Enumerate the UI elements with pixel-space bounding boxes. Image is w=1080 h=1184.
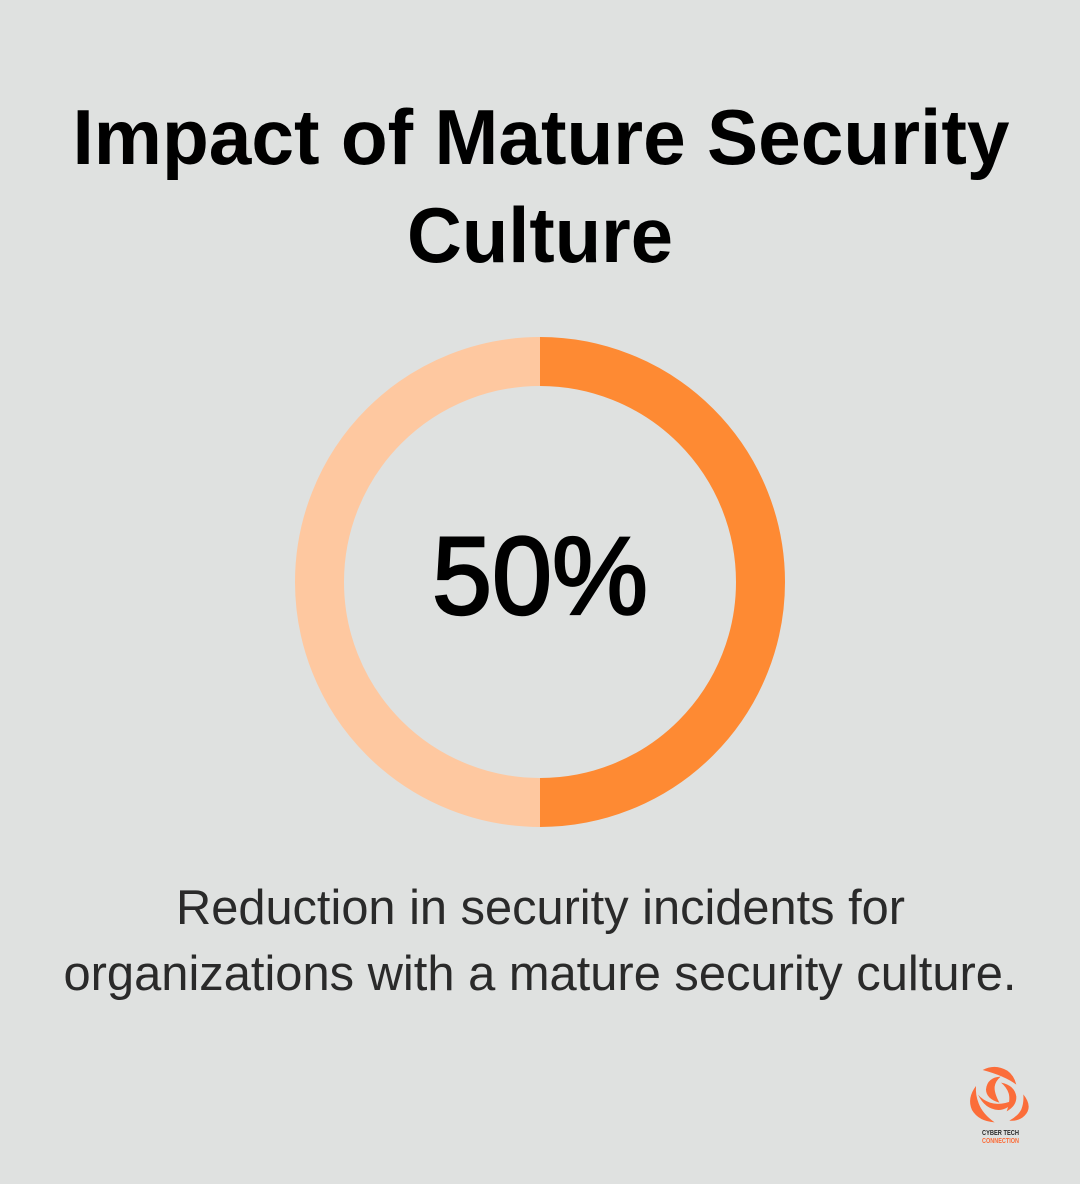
description bbox=[64, 881, 1016, 1001]
logo: Cyber Tech Connection bbox=[970, 1067, 1029, 1145]
donut value: 50% bbox=[432, 515, 648, 638]
highlighted share arc bbox=[540, 362, 760, 802]
icon: swirl mark bbox=[970, 1067, 1029, 1122]
title: Culture bbox=[407, 191, 673, 279]
remaining share arc bbox=[320, 362, 540, 802]
description: organizations with a mature security culture. bbox=[64, 947, 1016, 1001]
logo wordmark: CYBER TECH bbox=[982, 1128, 1019, 1137]
title bbox=[72, 93, 1010, 279]
logo: Cyber Tech Connection: CONNECTION bbox=[982, 1136, 1019, 1145]
title: Impact of Mature Security bbox=[72, 93, 1010, 181]
donut chart: 50% bbox=[320, 362, 760, 802]
description: Reduction in security incidents for bbox=[176, 881, 905, 935]
